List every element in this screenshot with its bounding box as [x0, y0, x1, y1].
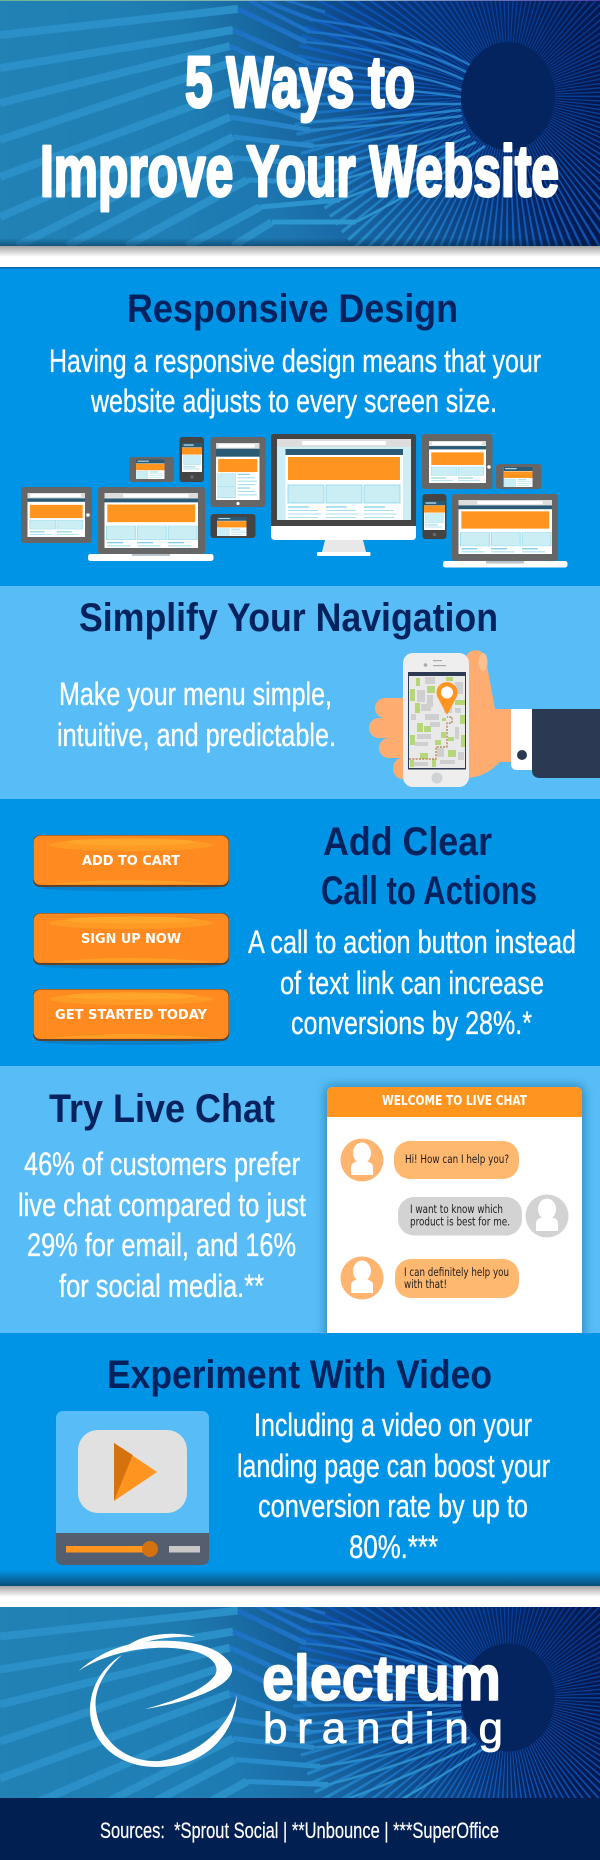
wordmark: electrum: electrum [262, 1642, 501, 1714]
chat header: WELCOME TO LIVE CHAT [382, 1094, 527, 1109]
text: responsive design body [49, 343, 541, 419]
button: sign up now: SIGN UP NOW [81, 931, 181, 947]
panel: simplify navigation [0, 586, 600, 799]
map pin [437, 682, 458, 715]
panel: header banner [0, 0, 600, 246]
heading: add clear call to actions: Add Clear [323, 820, 492, 864]
logo: electrum branding [78, 1634, 503, 1767]
avatar: agent 1 [340, 1138, 384, 1182]
device: tablet landscape right [422, 434, 492, 489]
hand [369, 650, 511, 779]
icon: video player [56, 1411, 209, 1565]
device: laptop right [443, 494, 568, 568]
text: live chat body: 29% for email, and 16% [27, 1227, 296, 1263]
panel: experiment with video [0, 1333, 600, 1586]
heading: simplify your navigation: Simplify Your Navigation [79, 596, 498, 640]
text: call to action body [248, 924, 576, 1041]
text: call to action body: conversions by 28%.* [291, 1005, 532, 1041]
text: live chat body: for social media.** [59, 1268, 264, 1304]
text: video body: Including a video on your [254, 1407, 532, 1443]
panel: sources bar [0, 1798, 600, 1860]
title: 5 Ways to [185, 43, 415, 123]
panel: responsive design [0, 267, 600, 586]
heading: try live chat: Try Live Chat [49, 1087, 275, 1131]
shirt cuff [511, 709, 532, 770]
text: video body: conversion rate by up to [258, 1488, 528, 1524]
avatar: agent 2 [340, 1256, 384, 1300]
text: navigation body: Make your menu simple, [59, 676, 332, 712]
phone [403, 653, 469, 787]
device: laptop left [88, 487, 214, 561]
bubble: agent reply: with that! [404, 1277, 447, 1291]
panel: live chat [0, 1066, 600, 1345]
map [409, 677, 465, 767]
button: get started today: GET STARTED TODAY [55, 1007, 207, 1023]
button: sign up now [33, 913, 229, 969]
panel: call to actions [0, 799, 600, 1066]
bubble: agent greeting [394, 1141, 519, 1179]
device: phone portrait [180, 437, 204, 482]
heading: experiment with video: Experiment With Video [107, 1353, 492, 1397]
bubble: customer question [398, 1197, 522, 1236]
bubble: agent reply: I can definitely help you [404, 1265, 509, 1279]
wordmark: branding: branding [263, 1704, 503, 1753]
text: navigation body: intuitive, and predictable. [57, 717, 336, 753]
icon: logo swoosh [78, 1634, 237, 1767]
device: phone portrait right [422, 494, 446, 539]
icon: hand holding phone with map [369, 650, 600, 787]
bubble: customer question: product is best for me. [410, 1214, 510, 1228]
text: video body [237, 1407, 550, 1565]
avatar: customer [526, 1194, 568, 1238]
text: live chat body: 46% of customers prefer [24, 1146, 300, 1182]
button: get started today [33, 989, 229, 1045]
device: tablet landscape left [21, 487, 92, 543]
device: desktop monitor [271, 434, 416, 556]
text: live chat body: live chat compared to just [18, 1187, 306, 1223]
bubble: customer question: I want to know which [410, 1202, 503, 1216]
button: add to cart [33, 835, 229, 891]
text: responsive design body: website adjusts to every screen size. [90, 383, 497, 419]
device: phone landscape [129, 457, 174, 482]
chat header [327, 1087, 582, 1117]
text: video body: 80%.*** [349, 1529, 438, 1565]
heading: responsive design: Responsive Design [127, 287, 458, 331]
panel: footer banner [0, 1607, 600, 1798]
bubble: agent reply [395, 1259, 519, 1298]
heading: add clear call to actions: Call to Actions [321, 869, 537, 913]
text: live chat body [18, 1146, 306, 1304]
icon: responsive devices [21, 434, 568, 568]
sleeve [532, 709, 600, 778]
device: phone landscape right [496, 464, 542, 489]
heading: add clear call to actions [321, 820, 537, 913]
bubble: agent greeting: Hi! How can I help you? [405, 1152, 509, 1166]
device: tablet portrait [210, 437, 266, 507]
button: add to cart: ADD TO CART [82, 853, 181, 869]
chat window [325, 1085, 584, 1345]
title [40, 43, 559, 212]
device: phone landscape lower [210, 514, 256, 538]
text: navigation body [57, 676, 336, 753]
